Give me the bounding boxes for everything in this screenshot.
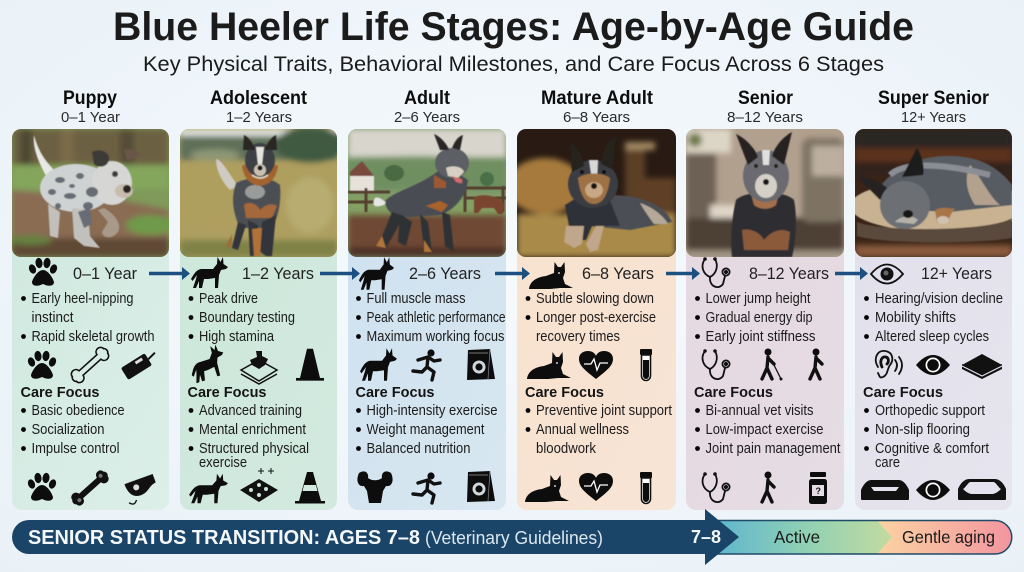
care list: Structured physical <box>199 440 309 457</box>
label: gentle aging: Gentle aging <box>902 527 995 547</box>
panel background <box>855 240 1012 510</box>
trait list: Maximum working focus <box>366 328 504 345</box>
care focus heading: Care Focus <box>863 384 943 401</box>
care focus heading: Care Focus <box>188 384 266 401</box>
icon: lying dog <box>529 262 573 289</box>
senior transition banner <box>12 509 1012 565</box>
age label: 8–12 Years <box>749 264 829 283</box>
photo: old dog sleeping on a bed <box>850 129 1024 257</box>
care list: Orthopedic support <box>875 402 986 419</box>
care list: exercise <box>199 454 247 471</box>
trait list <box>864 290 1003 345</box>
care list: Advanced training <box>199 402 302 419</box>
icon row: care <box>357 471 495 503</box>
trait list: Altered sleep cycles <box>875 328 989 345</box>
icon row: care <box>861 479 1006 500</box>
age label: 1–2 Years <box>242 264 314 283</box>
icon row: care: ? <box>816 486 821 496</box>
trait list: recovery times <box>536 328 620 345</box>
age range: 8–12 Years <box>727 110 803 126</box>
care list <box>189 402 309 471</box>
icon row: traits <box>185 343 324 384</box>
icon row: care <box>703 472 827 504</box>
care list: Basic obedience <box>32 402 124 419</box>
icon row: traits <box>360 348 495 381</box>
age range: 0–1 Year <box>61 110 120 126</box>
trait list: High stamina <box>199 328 275 345</box>
age range: 12+ Years <box>901 110 966 126</box>
age range: 6–8 Years <box>563 110 630 126</box>
trait list: Boundary testing <box>199 309 295 326</box>
panel background <box>180 240 337 510</box>
transition age: 7–8 <box>691 527 721 547</box>
care list: Non-slip flooring <box>875 421 970 438</box>
icon: dog silhouette <box>191 257 228 288</box>
panel: Mature Adult <box>507 88 676 510</box>
label: active: Active <box>774 527 820 547</box>
icon row: care <box>27 468 160 508</box>
arrow 4 <box>666 267 700 280</box>
arrow 5 <box>835 267 868 280</box>
trait list: Subtle slowing down <box>536 290 654 307</box>
trait list: Early joint stiffness <box>706 328 816 345</box>
care list <box>21 402 125 457</box>
panel: Adolescent <box>180 88 345 510</box>
care list: bloodwork <box>536 440 596 457</box>
photo: young dog standing in a field <box>180 127 345 257</box>
icon row: traits <box>703 348 822 380</box>
photo: mature dog on hay <box>507 129 676 257</box>
care list: Annual wellness <box>536 421 629 438</box>
arrow 2 <box>320 267 360 280</box>
care focus heading: Care Focus <box>20 384 100 401</box>
heading: Adolescent <box>210 88 308 109</box>
care list: Mental enrichment <box>199 421 307 438</box>
gradient bar <box>715 520 892 554</box>
care list <box>526 402 673 457</box>
care list: Weight management <box>366 421 485 438</box>
care list <box>356 402 498 457</box>
photo: adult dog on a farm <box>348 129 506 257</box>
heading: Puppy <box>63 88 117 109</box>
care list <box>695 402 841 457</box>
trait list: Peak athletic performance <box>366 309 506 326</box>
heading: Senior <box>738 88 794 109</box>
trait list: Mobility shifts <box>875 309 956 326</box>
care focus heading: Care Focus <box>525 384 604 401</box>
trait list <box>356 290 506 345</box>
care list: care <box>875 454 900 471</box>
trait list: Peak drive <box>199 290 258 307</box>
age label: 0–1 Year <box>73 264 137 283</box>
trait list: Lower jump height <box>706 290 811 307</box>
care focus heading: Care Focus <box>356 384 434 401</box>
trait list: Longer post-exercise <box>536 309 656 326</box>
age label: 12+ Years <box>921 264 992 283</box>
panel background <box>348 240 506 510</box>
panel: Adult <box>348 88 506 510</box>
heading: Mature Adult <box>541 88 654 109</box>
arrow 1 <box>149 267 190 280</box>
icon row: care <box>189 468 325 504</box>
age label: 6–8 Years <box>582 264 654 283</box>
icon: eye <box>871 264 903 284</box>
banner note: (Veterinary Guidelines) <box>425 528 603 548</box>
age range: 1–2 Years <box>226 110 292 126</box>
trait list: Rapid skeletal growth <box>32 328 154 345</box>
trait list: Gradual energy dip <box>706 309 812 326</box>
photo: puppy on a dirt path <box>8 129 174 257</box>
title: Blue Heeler Life Stages: Age-by-Age Guide <box>113 5 914 49</box>
care list: Cognitive & comfort <box>875 440 990 457</box>
care list: High-intensity exercise <box>366 402 498 419</box>
care list: Low-impact exercise <box>706 421 824 438</box>
care list: Balanced nutrition <box>366 440 470 457</box>
subtitle: Key Physical Traits, Behavioral Milestones, and Care Focus Across 6 Stages <box>143 53 884 76</box>
trait list <box>189 290 295 345</box>
care focus heading: Care Focus <box>694 384 773 401</box>
care list: Socialization <box>32 421 104 438</box>
age range: 2–6 Years <box>394 110 460 126</box>
care list <box>864 402 990 471</box>
icon: standing dog <box>359 257 394 290</box>
icon row: traits <box>527 349 652 380</box>
panel background <box>517 240 676 510</box>
trait list: Early heel-nipping <box>32 290 134 307</box>
heading: Adult <box>404 88 451 109</box>
panel background <box>12 240 169 510</box>
icon row: care <box>525 472 652 504</box>
panel: Puppy <box>8 88 174 510</box>
care list: Preventive joint support <box>536 402 673 419</box>
trait list: Full muscle mass <box>366 290 466 307</box>
icon row: traits <box>876 351 1002 379</box>
care list: Impulse control <box>32 440 120 457</box>
icon row: traits <box>27 345 160 385</box>
care list: Joint pain management <box>706 440 841 457</box>
trait list <box>695 290 816 345</box>
trait list: instinct <box>32 309 74 326</box>
trait list <box>526 290 656 345</box>
care list: Bi-annual vet visits <box>706 402 814 419</box>
icon: stethoscope <box>703 258 730 287</box>
banner headline: SENIOR STATUS TRANSITION: AGES 7–8 <box>28 527 420 549</box>
warm end of the bar <box>877 520 1012 554</box>
photo: senior dog in a living room <box>686 129 844 257</box>
panel: Senior <box>686 88 844 510</box>
trait list <box>21 290 154 345</box>
panel: Super Senior <box>855 90 1012 510</box>
icon: paw <box>28 257 58 286</box>
trait list: Hearing/vision decline <box>875 290 1003 307</box>
age label: 2–6 Years <box>409 264 481 283</box>
dark bar with arrowhead <box>12 509 739 565</box>
bar outline <box>715 520 1012 554</box>
panel background <box>686 240 844 510</box>
arrow 3 <box>495 267 530 280</box>
heading: Super Senior <box>878 88 990 109</box>
